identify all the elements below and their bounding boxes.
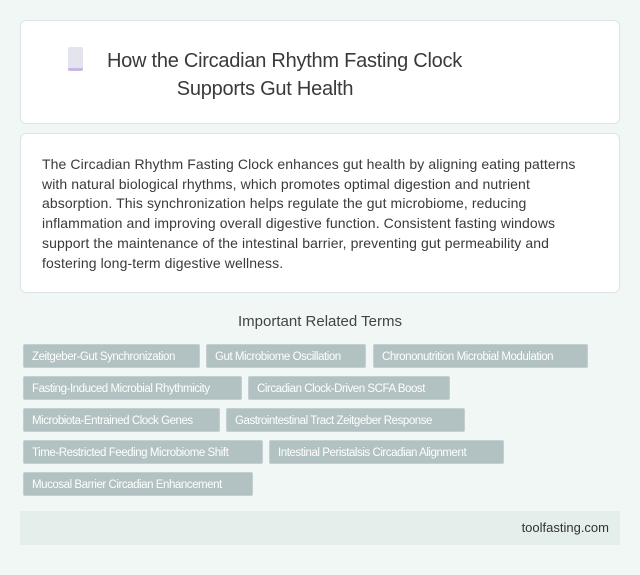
paragraph: fostering long-term digestive wellness. xyxy=(42,255,283,271)
description card xyxy=(20,133,620,293)
tags: Microbiota-Entrained Clock Genes xyxy=(32,415,193,427)
footer xyxy=(20,511,620,545)
tags: Mucosal Barrier Circadian Enhancement xyxy=(32,479,222,491)
paragraph: The Circadian Rhythm Fasting Clock enhances gut health by aligning eating patterns xyxy=(42,156,576,172)
paragraph: support the maintenance of the intestinal barrier, preventing gut permeability and xyxy=(42,235,549,251)
tags: Gastrointestinal Tract Zeitgeber Response xyxy=(235,415,432,427)
paragraph: absorption. This synchronization helps regulate the gut microbiome, reducing xyxy=(42,195,526,211)
footer text: toolfasting.com xyxy=(522,520,609,535)
title: How the Circadian Rhythm Fasting Clock xyxy=(107,50,462,72)
tags: Intestinal Peristalsis Circadian Alignment xyxy=(278,447,466,459)
tags: Fasting-Induced Microbial Rhythmicity xyxy=(32,383,210,395)
title: Supports Gut Health xyxy=(177,78,353,100)
header card xyxy=(20,20,620,124)
tags: Chrononutrition Microbial Modulation xyxy=(382,351,553,363)
paragraph xyxy=(42,156,576,271)
section heading: Important Related Terms xyxy=(238,313,402,330)
title xyxy=(68,47,462,100)
icon: document xyxy=(68,47,83,71)
tags: Time-Restricted Feeding Microbiome Shift xyxy=(32,447,228,459)
tags: Zeitgeber-Gut Synchronization xyxy=(32,351,175,363)
tags: Gut Microbiome Oscillation xyxy=(215,351,341,363)
paragraph: with natural biological rhythms, which promotes optimal digestion and nutrient xyxy=(42,176,530,192)
paragraph: inflammation and improving overall digestive function. Consistent fasting windows xyxy=(42,215,555,231)
tags: Circadian Clock-Driven SCFA Boost xyxy=(257,383,425,395)
